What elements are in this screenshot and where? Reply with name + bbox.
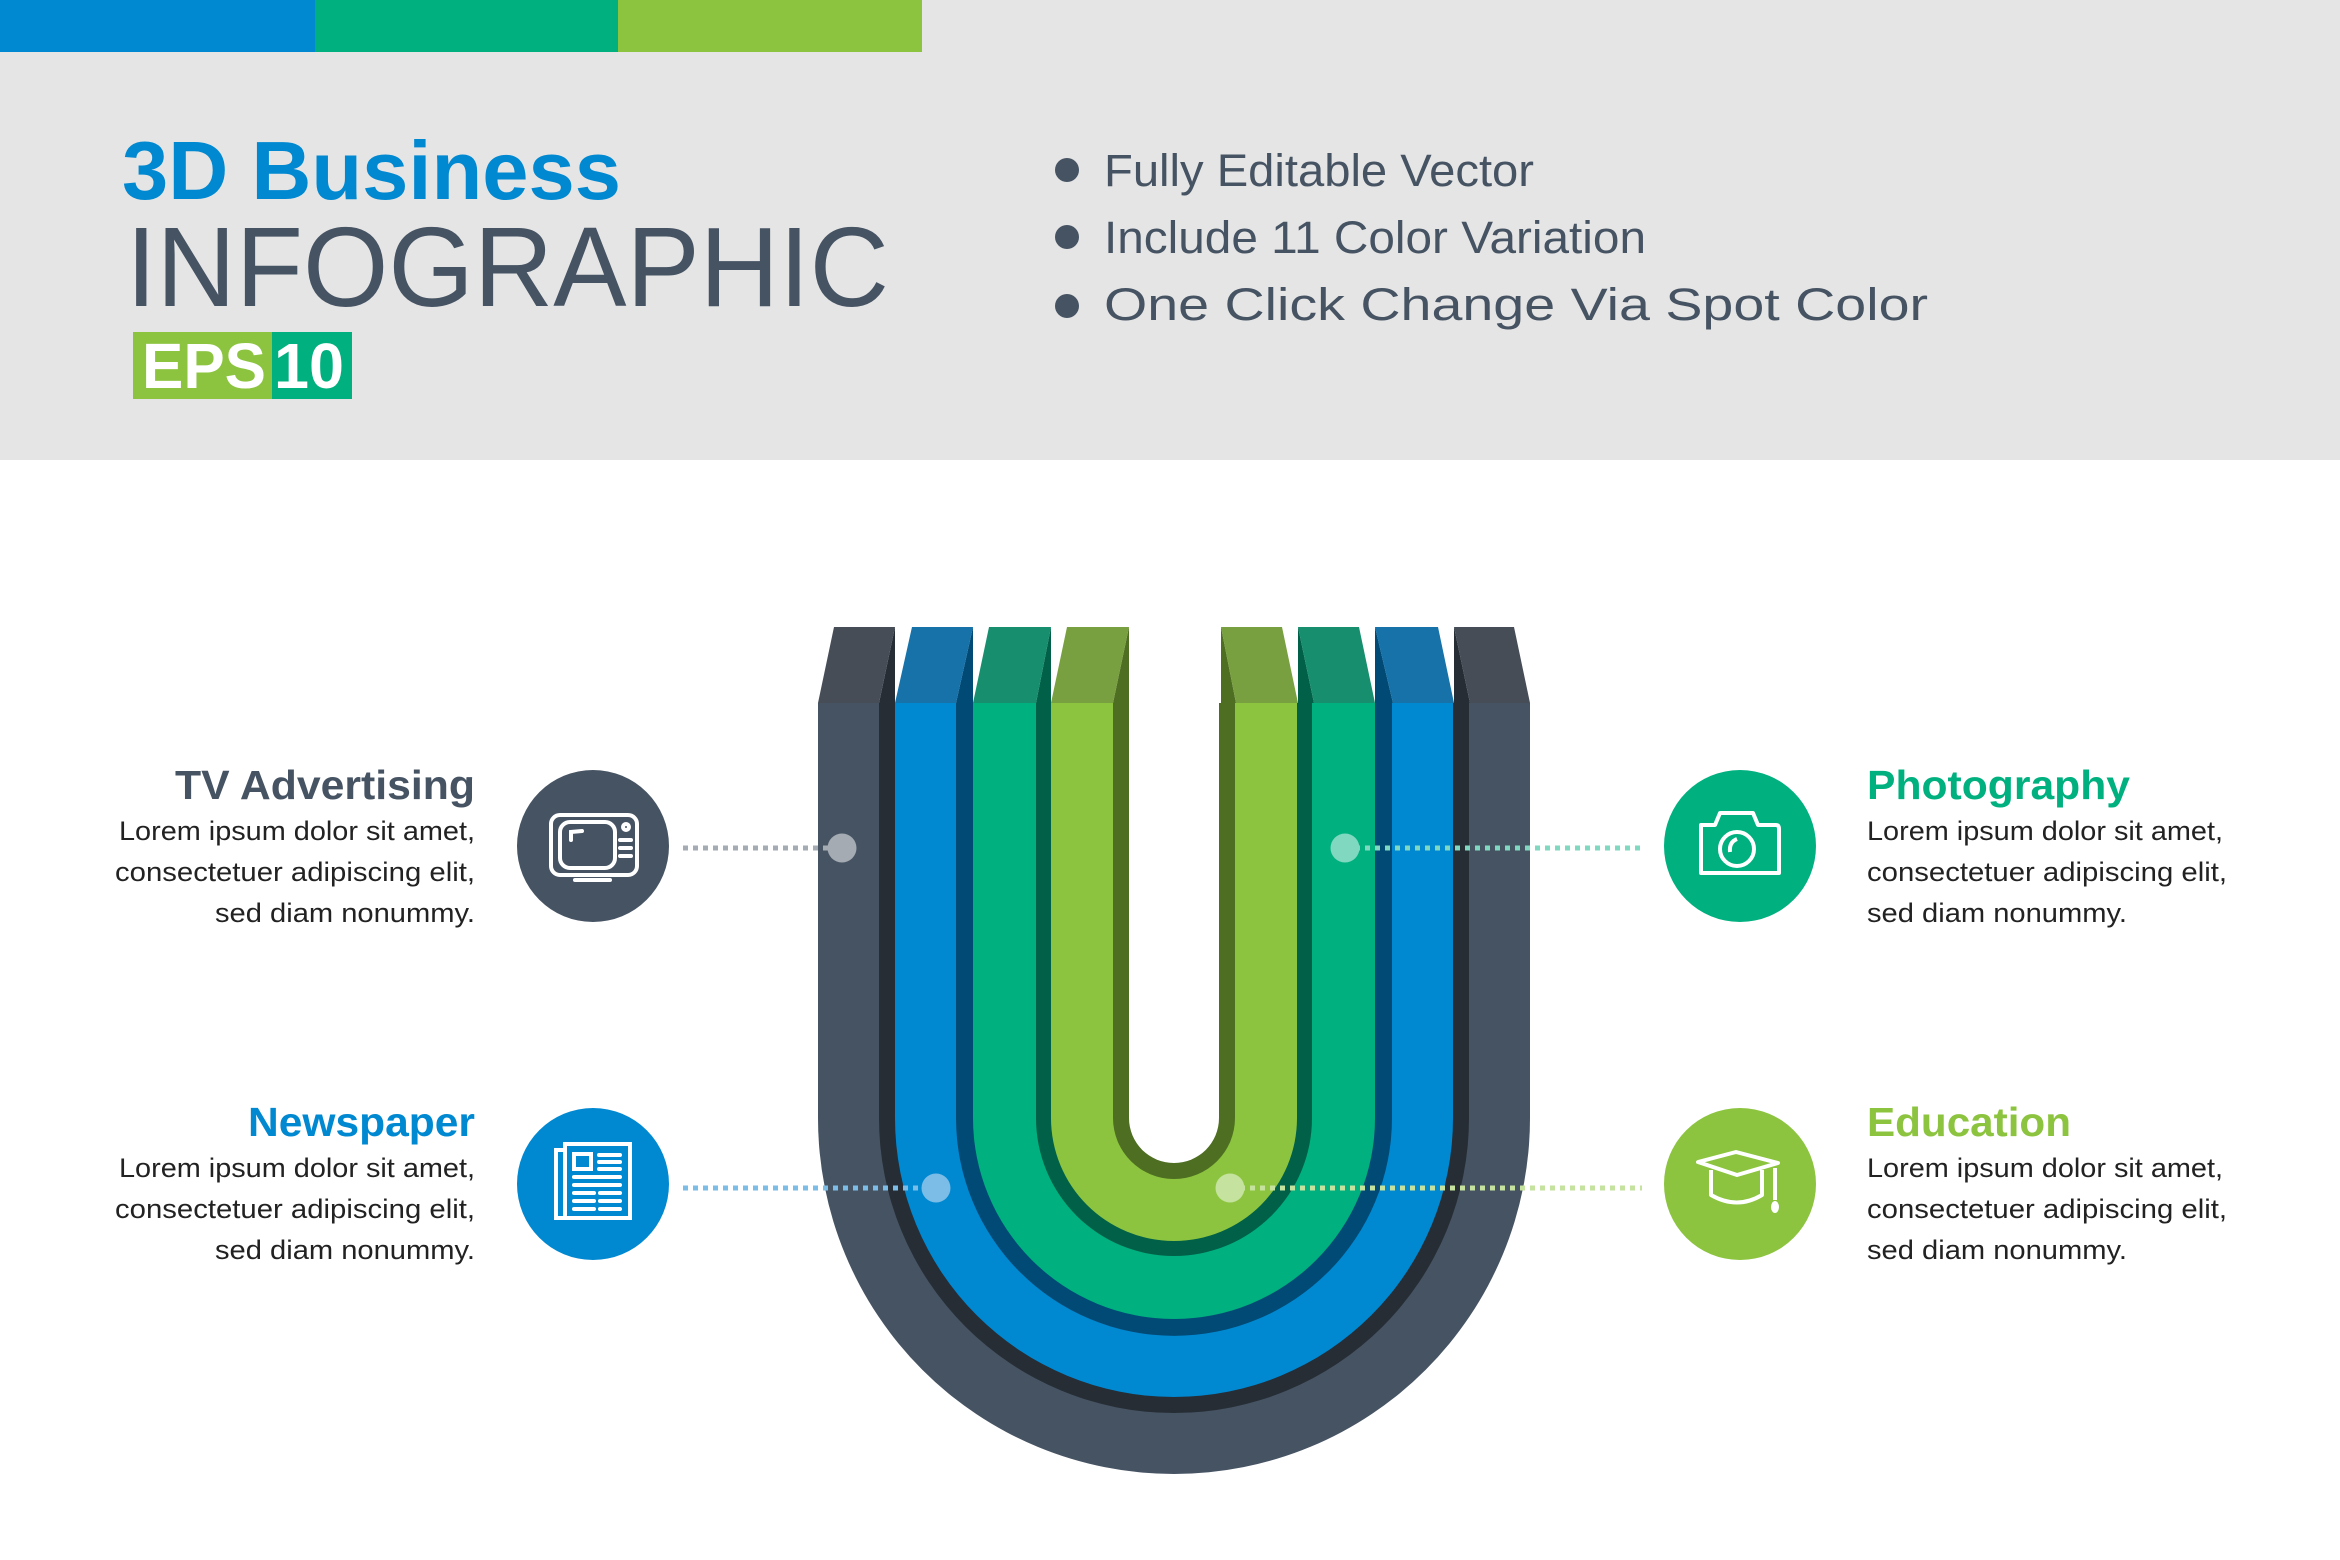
text: TV Advertising: TV Advertising [175,762,475,808]
connector: TV [683,834,856,862]
feature bullet list: Fully Editable Vector [1104,145,1534,196]
text: Photography [1867,762,2227,928]
text: TV Advertising: Lorem ipsum dolor sit amet, [119,816,475,846]
icon: camera [1664,770,1816,922]
text: Photography: Lorem ipsum dolor sit amet, [1867,816,2223,846]
text: Education [1867,1099,2227,1265]
icon: graduation cap [1664,1108,1816,1260]
header panel [0,0,2340,460]
icon: TV [517,770,669,922]
text: Education: consectetuer adipiscing elit, [1867,1194,2227,1224]
text: Education: Lorem ipsum dolor sit amet, [1867,1153,2223,1183]
text: TV Advertising: sed diam nonummy. [215,898,475,928]
text: Newspaper: sed diam nonummy. [215,1235,475,1265]
badge: EPS10 [133,330,352,402]
connector: newspaper [683,1174,950,1202]
left tops [879,627,895,703]
U chart [818,627,1530,1474]
title [122,124,889,330]
right tops [1221,627,1236,703]
text: Newspaper: Newspaper [248,1099,475,1145]
text: TV Advertising: consectetuer adipiscing elit, [115,857,475,887]
text: TV Advertising [115,762,475,928]
text: Education: sed diam nonummy. [1867,1235,2127,1265]
title: 3D Business [122,124,621,217]
feature bullet list: Include 11 Color Variation [1104,212,1646,263]
text: Photography: Photography [1867,762,2130,808]
feature bullet list: One Click Change Via Spot Color [1104,279,1928,330]
text: Photography: consectetuer adipiscing elit, [1867,857,2227,887]
badge: EPS10: 10 [274,330,344,402]
connector: photography [1330,834,1642,862]
text: Photography: sed diam nonummy. [1867,898,2127,928]
feature bullet list [1055,145,1928,330]
text: Education: Education [1867,1099,2071,1145]
title: INFOGRAPHIC [126,204,889,330]
icon: newspaper [517,1108,669,1260]
text: Newspaper [115,1099,475,1265]
connector: education [1216,1174,1642,1202]
badge: EPS10: EPS [142,330,266,402]
text: Newspaper: consectetuer adipiscing elit, [115,1194,475,1224]
text: Newspaper: Lorem ipsum dolor sit amet, [119,1153,475,1183]
